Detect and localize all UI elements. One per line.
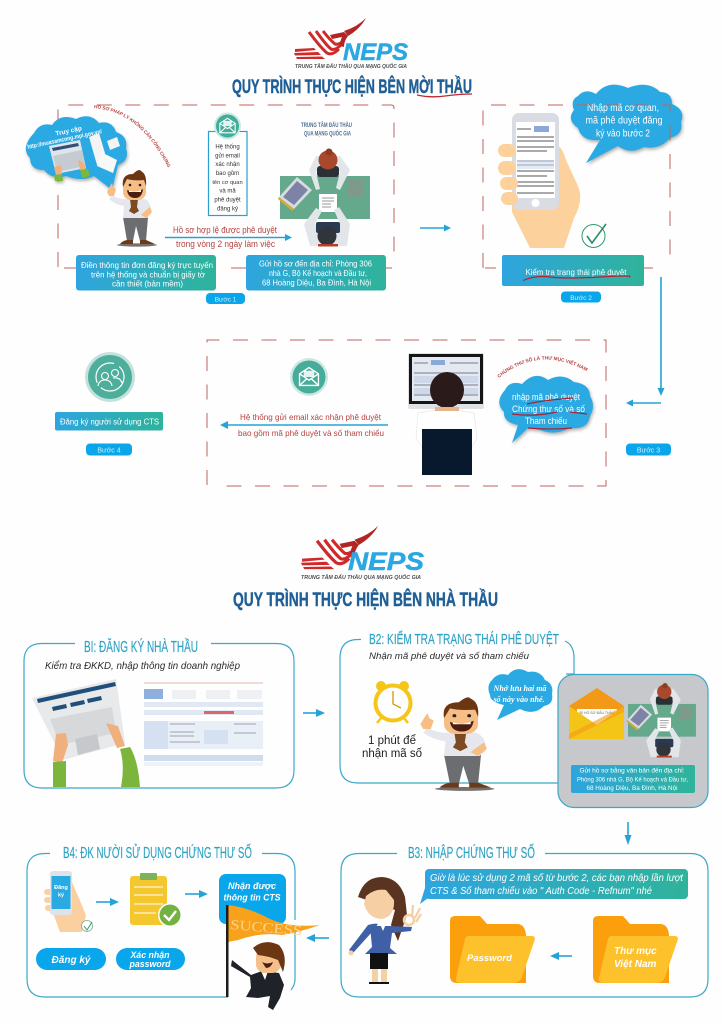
panel: B1: BI: ĐĂNG KÝ NHÀ THẦU bbox=[84, 639, 198, 656]
pill: register: Đăng ký bbox=[52, 955, 91, 966]
text box: mail address bbox=[571, 765, 695, 793]
logo: NEPS bottom: TRUNG TÂM ĐẤU THẦU QUA MẠNG QUỐC GIA bbox=[301, 574, 421, 581]
text: one minute: 1 phút để bbox=[368, 735, 416, 747]
arrow: approved: trong vòng 2 ngày làm việc bbox=[176, 239, 276, 249]
pill: register bbox=[36, 948, 106, 970]
logo: NEPS bottom bbox=[301, 526, 424, 581]
pill: step 2 bbox=[561, 292, 601, 302]
arrow: step 1 to 2 bbox=[420, 224, 451, 232]
illustration: person at computer bbox=[408, 353, 484, 475]
character: businessman bbox=[107, 170, 157, 247]
card: email confirmation: Hệ thống bbox=[215, 144, 240, 150]
card: email confirmation: tên cơ quan bbox=[212, 180, 243, 186]
icon: folder vietnam bbox=[593, 916, 678, 983]
arrow: email confirmation bbox=[220, 412, 388, 438]
icon: alarm clock bbox=[376, 681, 410, 723]
panel: step 2 bbox=[483, 85, 682, 302]
text box: fill form: Điền thông tin đơn đăng ký trực tuyến bbox=[81, 261, 213, 270]
text: one minute bbox=[362, 735, 423, 760]
speech cloud: remember codes: số này vào nhé. bbox=[492, 695, 545, 704]
title: bên mời thầu: QUY TRÌNH THỰC HIỆN BÊN MỜI THẦU bbox=[232, 74, 472, 98]
icon: users bbox=[85, 352, 135, 402]
text box: check status: Kiểm tra trạng thái phê duyệt bbox=[526, 267, 627, 277]
speech cloud: enter certificate: nhập mã phê duyệt bbox=[512, 392, 580, 402]
box: received CTS bbox=[219, 874, 286, 924]
card: email confirmation: xác nhận bbox=[215, 162, 240, 168]
pill: step 4: Bước 4 bbox=[97, 448, 121, 454]
text box: mail address: Phòng 306 nhà G, Bộ Kế hoạch và Đầu tư, bbox=[577, 774, 688, 784]
panel: B2 bbox=[340, 630, 574, 791]
arrow bbox=[185, 890, 208, 898]
callout: instructions: CTS & Số tham chiếu vào " Auth Code - Refnum" nhé bbox=[430, 885, 652, 897]
panel: step 4 bbox=[55, 352, 163, 456]
icon: folder vietnam: Việt Nam bbox=[614, 959, 657, 970]
logo: NEPS top: TRUNG TÂM ĐẤU THẦU QUA MẠNG QUỐC GIA bbox=[295, 63, 407, 70]
text: one minute: nhận mã số bbox=[362, 748, 423, 760]
card: email confirmation bbox=[208, 112, 247, 216]
icon: folder password bbox=[450, 916, 535, 983]
panel: B1: Kiểm tra ĐKKD, nhập thông tin doanh nghiệp bbox=[45, 660, 240, 672]
icon: folder vietnam: Thư mục bbox=[614, 946, 657, 957]
text box: send documents: 68 Hoàng Diệu, Ba Đình, Hà Nội bbox=[262, 278, 371, 288]
arrow: email confirmation: bao gồm mã phê duyệt và số tham chiếu bbox=[238, 428, 384, 438]
arrow: B2 to B3 bbox=[624, 822, 632, 845]
logo: NEPS top bbox=[294, 18, 408, 70]
icon: folder password: Password bbox=[467, 953, 512, 964]
pill: step 1: Bước 1 bbox=[215, 296, 237, 304]
logo: NEPS bottom: NEPS bbox=[348, 548, 424, 576]
speech cloud: remember codes: Nhớ lưu hai mã bbox=[493, 684, 546, 693]
arrow: approved bbox=[165, 225, 292, 249]
text box: mail address: 68 Hoàng Diệu, Ba Đình, Hà Nội bbox=[586, 785, 678, 792]
curved note: legal documents: HỒ SƠ PHÁP LÝ KHÔNG CẦN CÔNG CHỨNG bbox=[94, 104, 170, 168]
speech cloud: website bbox=[26, 116, 127, 190]
panel: B3 bbox=[341, 844, 708, 997]
callout: instructions bbox=[420, 869, 688, 904]
panel: step 1 bbox=[25, 104, 394, 304]
text box: mail address: Gửi hồ sơ bằng văn bản đến địa chỉ: bbox=[580, 766, 685, 774]
pill: step 3: Bước 3 bbox=[637, 448, 660, 454]
text box: fill form: cần thiết (bản mềm) bbox=[112, 280, 183, 288]
speech cloud: enter agency code: Nhập mã cơ quan, bbox=[587, 103, 659, 114]
label: national center bbox=[301, 122, 352, 138]
speech cloud: enter agency code: ký vào bước 2 bbox=[596, 128, 650, 140]
arrow: folder to folder bbox=[550, 952, 572, 960]
panel: step 3 bbox=[206, 340, 606, 486]
icon: envelope bbox=[569, 688, 624, 739]
box: received CTS: Nhận được bbox=[228, 881, 276, 891]
speech cloud: remember codes bbox=[488, 669, 552, 720]
card: email confirmation: phê duyệt bbox=[214, 198, 241, 204]
speech cloud: enter agency code bbox=[571, 85, 682, 163]
illustration: phone registration bbox=[44, 871, 92, 932]
text box: fill form: trên hệ thống và chuẩn bị giấy tờ bbox=[91, 270, 206, 280]
illustration: office desk bbox=[278, 148, 370, 246]
card: email confirmation: đăng ký bbox=[217, 206, 238, 212]
arrow: to step 3 panel bbox=[626, 400, 661, 406]
icon: clipboard check bbox=[130, 873, 182, 927]
illustration: office desk bbox=[626, 683, 696, 758]
arrow: step 2 to 3 bbox=[658, 277, 664, 396]
text box: fill form bbox=[76, 255, 216, 290]
label: national center: TRUNG TÂM ĐẤU THẦU bbox=[301, 122, 352, 129]
box: received CTS: thông tin CTS bbox=[224, 892, 280, 902]
arrow: B1 to B2 bbox=[303, 709, 325, 717]
speech cloud: enter certificate: Tham chiếu bbox=[525, 416, 567, 426]
logo: NEPS top: NEPS bbox=[343, 39, 408, 66]
icon: envelope: ĐỊ HỒ SƠ ĐẤU THẦU bbox=[580, 710, 615, 715]
pill: confirm password: password bbox=[128, 959, 171, 969]
arrow: email confirmation: Hệ thống gửi email xác nhận phê duyệt bbox=[240, 412, 382, 422]
speech cloud: enter agency code: mã phê duyệt đăng bbox=[586, 116, 662, 126]
arrow: approved: Hồ sơ hợp lệ được phê duyệt bbox=[173, 225, 277, 235]
panel: B2: Nhận mã phê duyệt và số tham chiếu bbox=[369, 651, 529, 661]
pill: step 2: Bước 2 bbox=[570, 295, 592, 302]
pill: confirm password: Xác nhận bbox=[129, 950, 170, 960]
panel: send by post bbox=[558, 674, 708, 808]
panel: B1 bbox=[24, 639, 294, 788]
speech cloud: enter certificate: Chứng thư số và số bbox=[512, 404, 585, 414]
curved note: digital certificate: CHỨNG THƯ SỐ LÀ THƯ MỤC VIỆT NAM bbox=[498, 356, 588, 378]
illustration: success flag bbox=[226, 905, 320, 997]
icon: check mark bbox=[582, 224, 606, 248]
text box: send documents: Gửi hồ sơ đến địa chỉ: Phòng 306 bbox=[259, 260, 372, 268]
speech cloud: website: Truy cập bbox=[55, 125, 83, 138]
illustration: hand holding phone bbox=[498, 113, 580, 248]
icon: email bbox=[290, 358, 328, 396]
illustration: phone registration: Đăng bbox=[54, 885, 68, 891]
label: national center: QUA MẠNG QUỐC GIA bbox=[304, 130, 351, 138]
character: woman bbox=[348, 877, 421, 984]
panel: B3: B3: NHẬP CHỨNG THƯ SỐ bbox=[408, 844, 535, 862]
character: climbing man bbox=[231, 942, 285, 1010]
screenshot: registration form bbox=[144, 683, 263, 766]
text box: check status bbox=[502, 255, 644, 286]
panel: B2: B2: KIỂM TRA TRẠNG THÁI PHÊ DUYỆT bbox=[369, 630, 559, 648]
pill: step 3 bbox=[626, 444, 671, 456]
text box: register: Đăng ký người sử dụng CTS bbox=[60, 416, 159, 426]
card: email confirmation: gửi email bbox=[215, 152, 240, 160]
panel: B4 bbox=[27, 844, 320, 1010]
speech cloud: website: http://muasamcong.mpi.gov.vn/ bbox=[27, 129, 103, 151]
callout: instructions: Giờ là lúc sử dụng 2 mã số từ bước 2, các bạn nhập lần lượt bbox=[430, 872, 684, 884]
arrow: B3 to B4 bbox=[306, 934, 329, 942]
pill: confirm password bbox=[116, 948, 185, 970]
card: email confirmation: bao gồm bbox=[216, 171, 239, 177]
illustration: success flag: SUCCESS bbox=[230, 918, 303, 939]
arrow bbox=[96, 898, 119, 906]
illustration: phone registration: ký bbox=[58, 892, 65, 898]
title: bên nhà thầu: QUY TRÌNH THỰC HIỆN BÊN NHÀ THẦU bbox=[233, 587, 498, 611]
pill: step 1 bbox=[206, 293, 245, 304]
text box: send documents bbox=[246, 255, 386, 290]
illustration: laptop and hands bbox=[32, 679, 140, 787]
card: email confirmation: và mã bbox=[219, 188, 236, 194]
panel: B4: B4: ĐK NƯỜI SỬ DỤNG CHỨNG THƯ SỐ bbox=[63, 844, 252, 862]
speech cloud: enter certificate bbox=[499, 376, 593, 443]
character: businessman bbox=[420, 697, 494, 791]
text box: send documents: nhà G, Bộ Kế hoạch và Đầu tư, bbox=[269, 269, 367, 278]
